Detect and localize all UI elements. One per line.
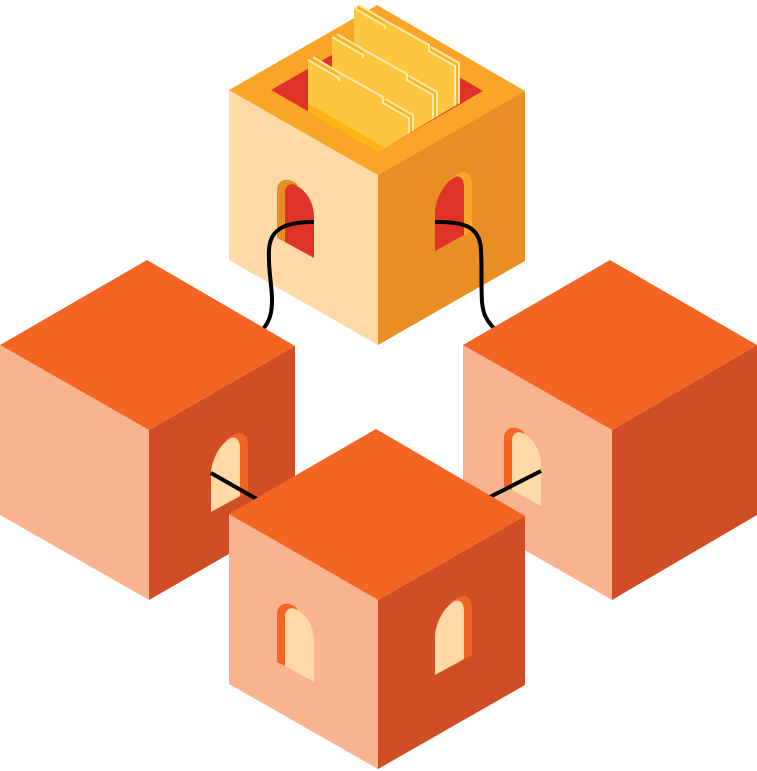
window: top cube right [435,172,472,251]
window: bottom cube left [277,604,314,682]
left cube [0,260,295,600]
top cube: folder storage [229,5,525,345]
folder: front [308,56,414,148]
cable: top cube to left cube [263,222,314,329]
right cube [463,260,757,600]
folders [308,4,460,152]
folder: rear [354,5,459,148]
window: top cube left [277,180,314,258]
opening in the top cube [271,29,483,152]
window: left cube [211,433,248,512]
bottom cube [229,429,525,769]
top cube rim cover [229,90,525,175]
window: bottom cube right [435,596,472,675]
window: right cube [504,428,541,506]
cable: left cube to bottom cube [211,473,262,502]
cable: right cube to bottom cube [486,471,541,499]
cable: top cube to right cube [435,222,496,330]
folder: middle [332,33,438,147]
